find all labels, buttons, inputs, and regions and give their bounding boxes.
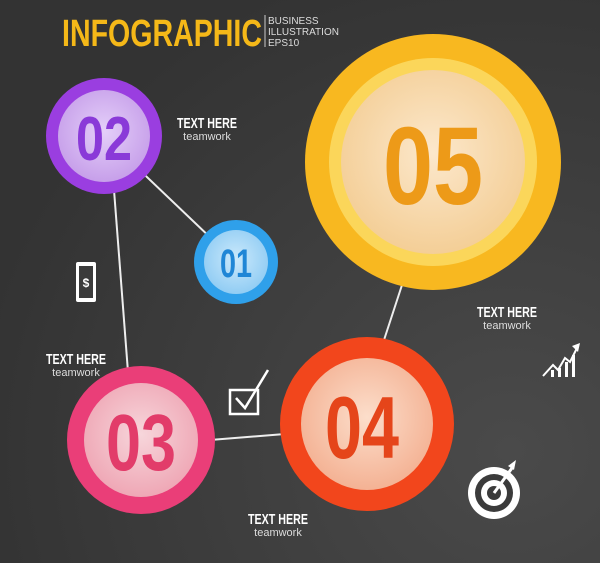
circle 02 bbox=[46, 78, 162, 194]
circle 02: 02 bbox=[76, 105, 132, 174]
title: BUSINESS bbox=[268, 16, 319, 27]
icon: money bbox=[76, 262, 96, 302]
labels: TEXT HERE bbox=[46, 351, 106, 368]
circle 04: 04 bbox=[325, 378, 399, 477]
title: ILLUSTRATION bbox=[268, 27, 339, 38]
labels: TEXT HERE bbox=[248, 511, 308, 528]
labels: teamwork bbox=[254, 527, 302, 539]
circle 03: 03 bbox=[106, 398, 176, 487]
labels: teamwork bbox=[183, 131, 231, 143]
labels: teamwork bbox=[52, 367, 100, 379]
labels bbox=[46, 115, 537, 539]
icon: money: $ bbox=[83, 276, 90, 290]
labels: TEXT HERE bbox=[177, 115, 237, 132]
labels: teamwork bbox=[483, 320, 531, 332]
circle 01: 01 bbox=[220, 242, 252, 286]
icon: target bbox=[468, 460, 520, 519]
title: INFOGRAPHIC bbox=[62, 13, 262, 55]
circle 01 bbox=[194, 220, 278, 304]
circle 05 bbox=[305, 34, 561, 290]
circle 04 bbox=[280, 337, 454, 511]
title: EPS10 bbox=[268, 38, 300, 49]
icon: chart bbox=[543, 343, 580, 377]
circle 03 bbox=[67, 366, 215, 514]
icon: checkbox bbox=[230, 370, 268, 414]
circle 05: 05 bbox=[383, 105, 483, 228]
labels: TEXT HERE bbox=[477, 304, 537, 321]
